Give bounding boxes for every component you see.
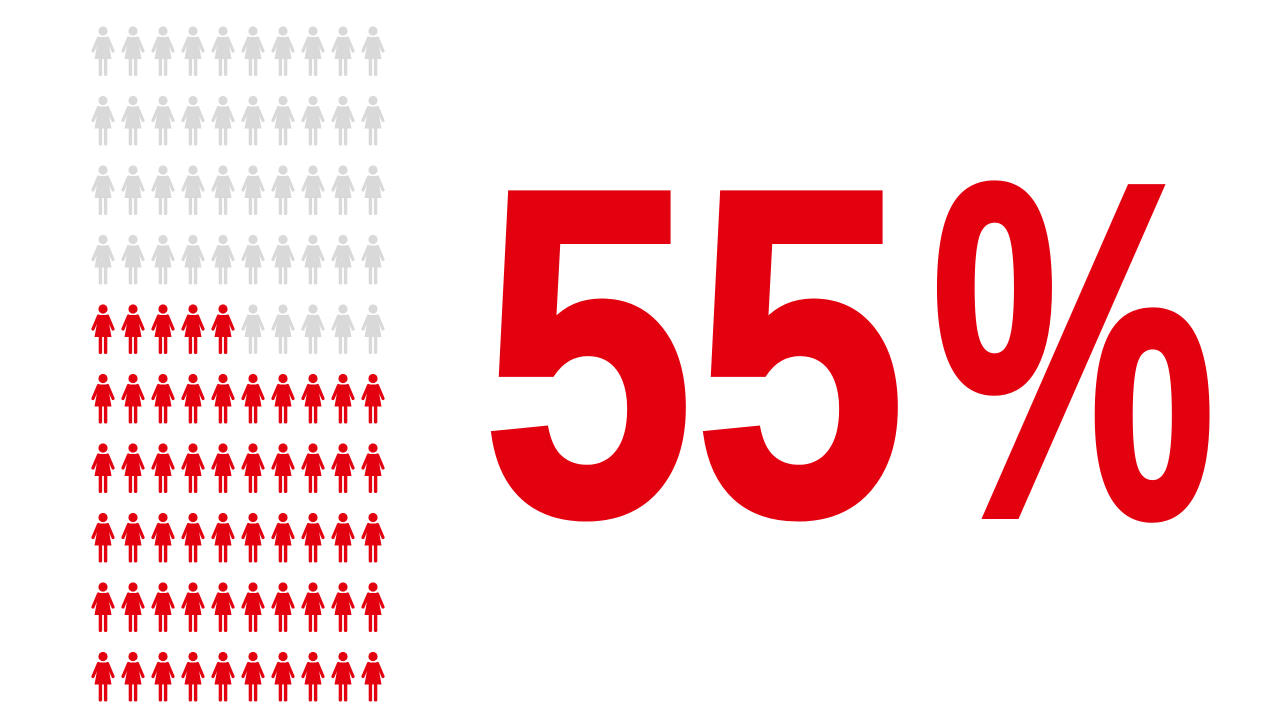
row 9 red [93,582,383,632]
row 1 grey [93,26,383,76]
row 6 red [93,374,383,424]
row 10 red [93,652,383,702]
pictogram grid: 100 women, 55 highlighted [93,26,383,701]
row 2 grey [93,96,383,146]
row 8 red [93,513,383,562]
row 3 grey [93,165,383,215]
row 7 red [93,443,383,493]
row 5 mixed [93,304,383,354]
big percentage [482,84,1216,618]
big percentage: 55 [482,92,906,613]
row 4 grey [93,235,383,284]
